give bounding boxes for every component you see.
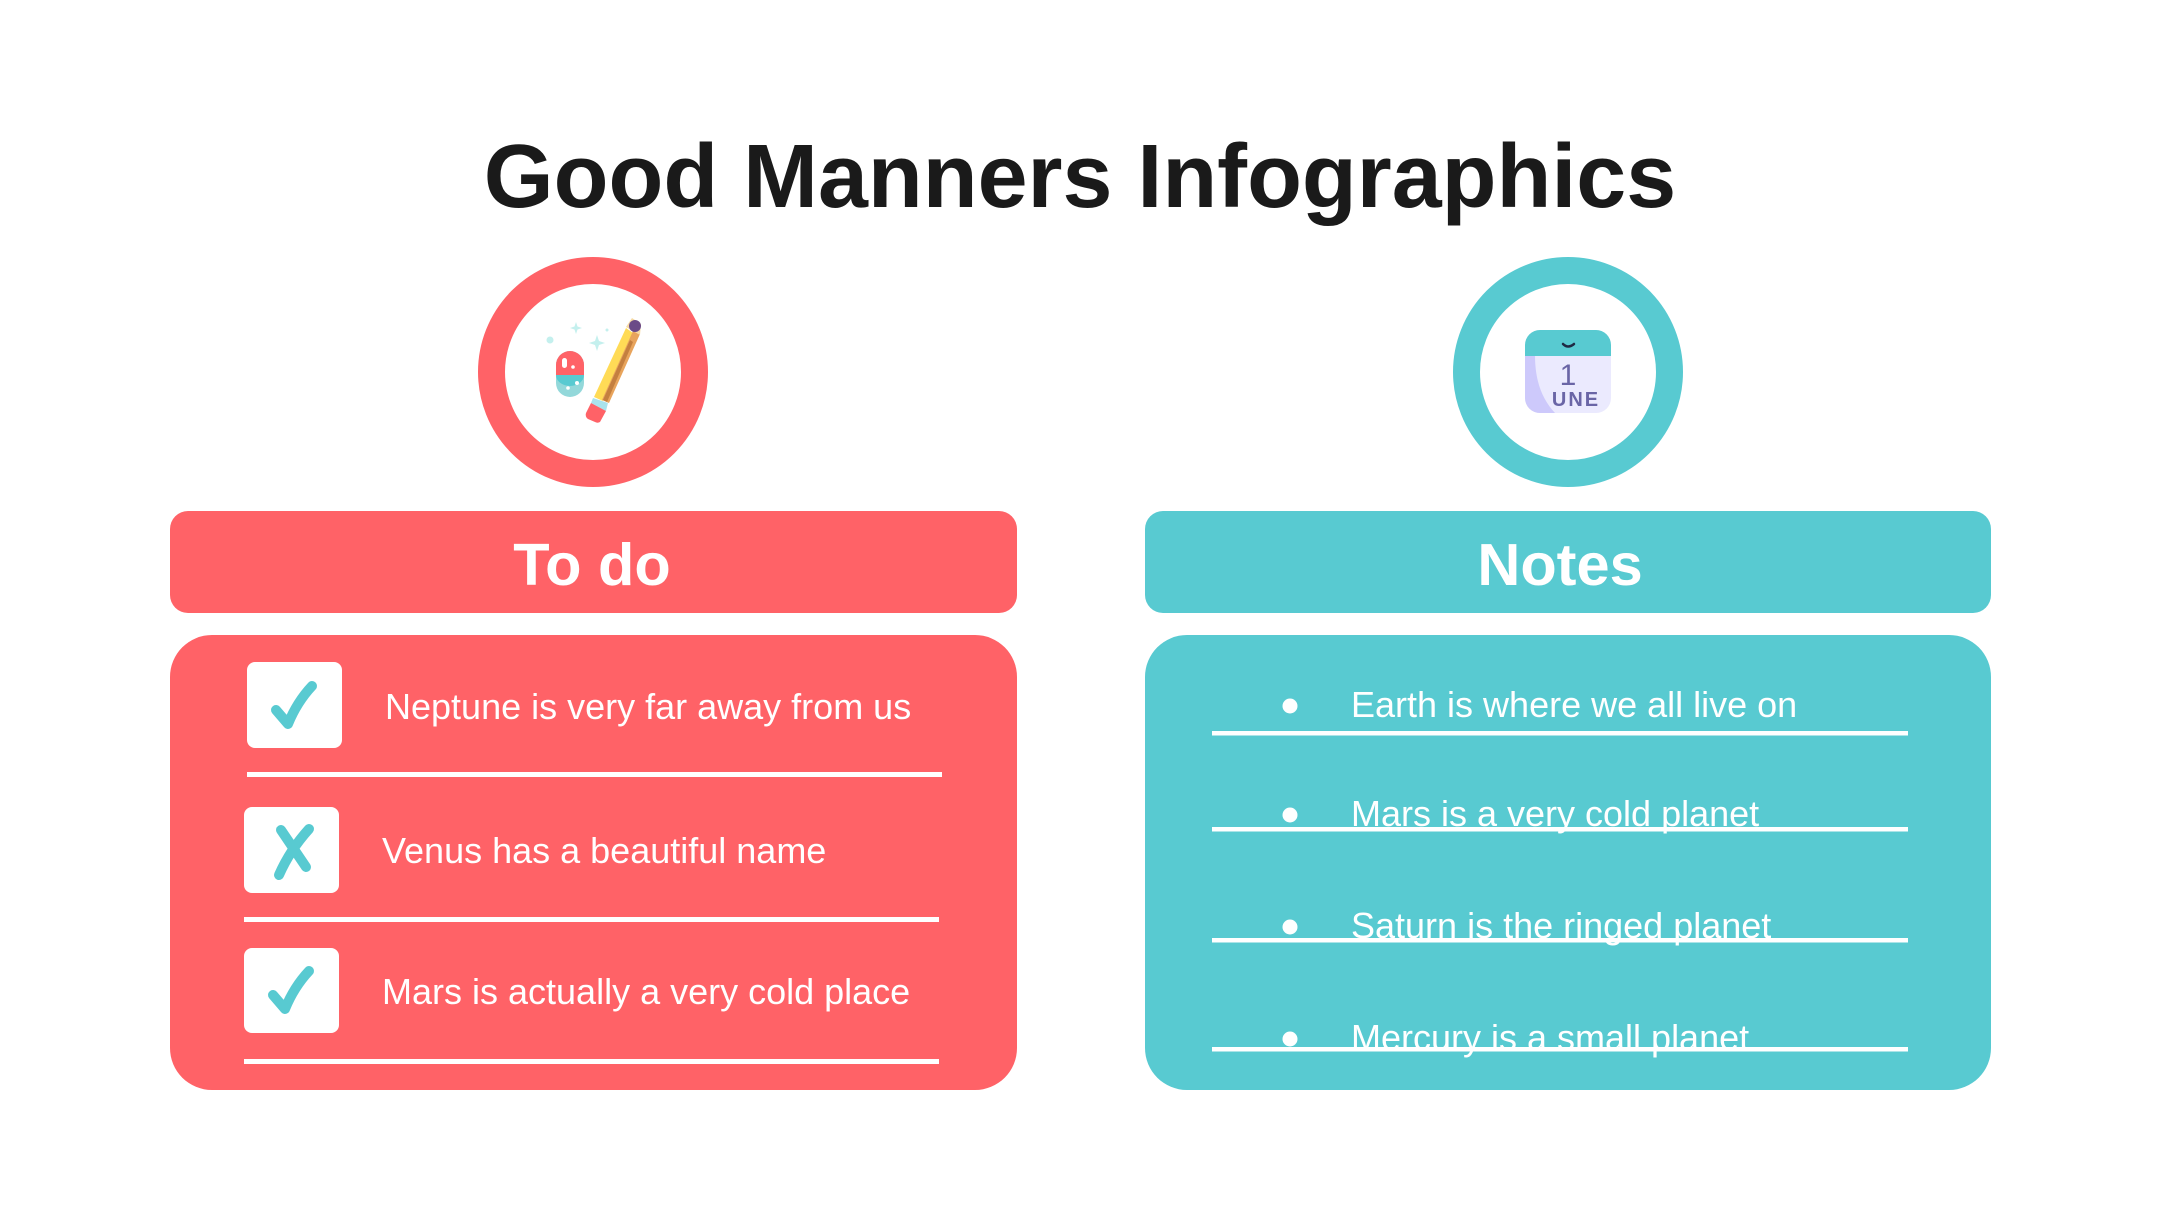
to do item 1	[247, 662, 942, 777]
to do item 3: Mars is actually a very cold place	[382, 971, 910, 1012]
note 1	[1212, 684, 1908, 736]
panel: to do header: To do	[513, 531, 671, 598]
panel: notes header: Notes	[1477, 531, 1643, 598]
note 4: Mercury is a small planet	[1351, 1017, 1749, 1058]
icon: pencil and eraser in red ring	[492, 270, 694, 474]
note 3	[1212, 905, 1908, 946]
note 2: Mars is a very cold planet	[1351, 793, 1759, 834]
icon: calendar in teal ring	[1466, 270, 1670, 474]
note 2	[1212, 793, 1908, 834]
to do item 2	[244, 807, 939, 922]
panel: notes list	[1145, 635, 1991, 1090]
panel: to do list	[170, 635, 1017, 1090]
panel: notes header	[1145, 511, 1991, 613]
panel: to do header	[170, 511, 1017, 613]
icon: calendar in teal ring: 1	[1560, 359, 1576, 392]
note 3: Saturn is the ringed planet	[1351, 905, 1771, 946]
to do item 2: Venus has a beautiful name	[382, 830, 826, 871]
icon: calendar in teal ring: UNE	[1552, 389, 1600, 411]
to do item 3	[244, 948, 939, 1064]
title: Good Manners Infographics	[484, 127, 1676, 227]
to do item 1: Neptune is very far away from us	[385, 686, 911, 727]
note 4	[1212, 1017, 1908, 1058]
note 1: Earth is where we all live on	[1351, 684, 1797, 725]
